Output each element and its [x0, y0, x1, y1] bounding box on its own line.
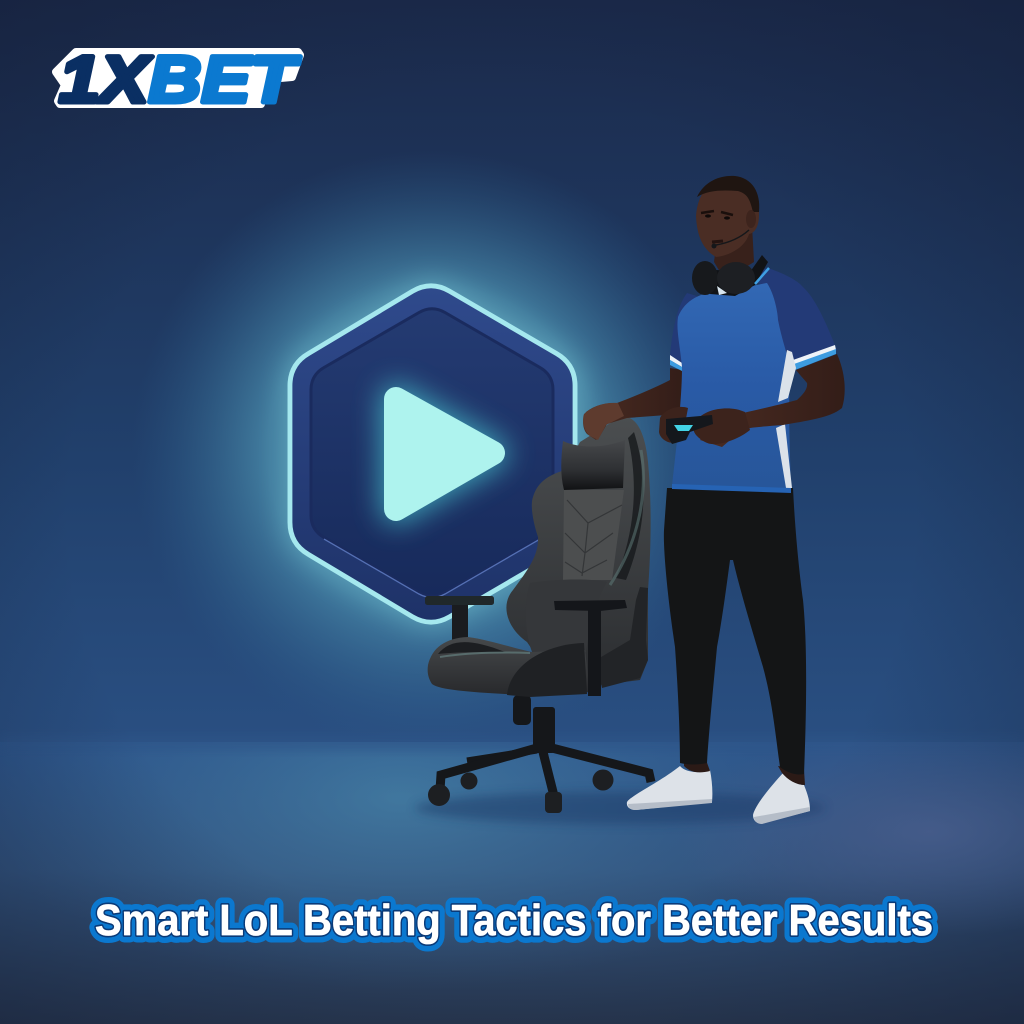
- chair lumbar cushion: [526, 579, 607, 652]
- shoes: [627, 766, 810, 824]
- shirt cuffs: [670, 345, 836, 367]
- title: Smart LoL Betting Tactics for Better Results: [95, 896, 933, 945]
- hexagon frame with glowing rim: [290, 286, 575, 622]
- shirt torso: [672, 283, 791, 491]
- trousers: [664, 488, 806, 775]
- game controller: [666, 415, 713, 444]
- chair seat: [428, 637, 590, 695]
- headphones: [692, 255, 769, 296]
- person with controller: [583, 176, 845, 824]
- left arm: [583, 368, 683, 440]
- right arm: [700, 354, 845, 447]
- logo white backing: [56, 52, 300, 104]
- gaming chair: [425, 417, 651, 813]
- title: Smart LoL Betting Tactics for Better Results: [95, 896, 933, 945]
- chair side cover: [507, 643, 587, 697]
- logo: 1XBET: [56, 42, 300, 116]
- hexagon play badge: [287, 282, 580, 626]
- chair headrest pillow: [561, 440, 625, 490]
- ankles: [684, 760, 805, 785]
- chair base: [428, 695, 651, 813]
- hexagon inner panel: [311, 309, 553, 596]
- neck and head: [696, 176, 759, 280]
- chair chevron panel: [563, 490, 624, 580]
- shirt sleeves: [670, 293, 697, 367]
- chair left armrest: [425, 596, 494, 643]
- chair side bolster: [596, 587, 648, 688]
- title: Smart LoL Betting Tactics for Better Results: [95, 896, 933, 945]
- chair backrest: [506, 417, 651, 690]
- logo wordmark: 1XBET: [59, 42, 300, 116]
- hexagon halo: [287, 282, 580, 626]
- play triangle glow: [396, 399, 493, 509]
- chair right armrest: [554, 600, 627, 696]
- hands: [659, 407, 750, 444]
- floor shadow: [415, 792, 825, 824]
- play triangle: [396, 399, 493, 509]
